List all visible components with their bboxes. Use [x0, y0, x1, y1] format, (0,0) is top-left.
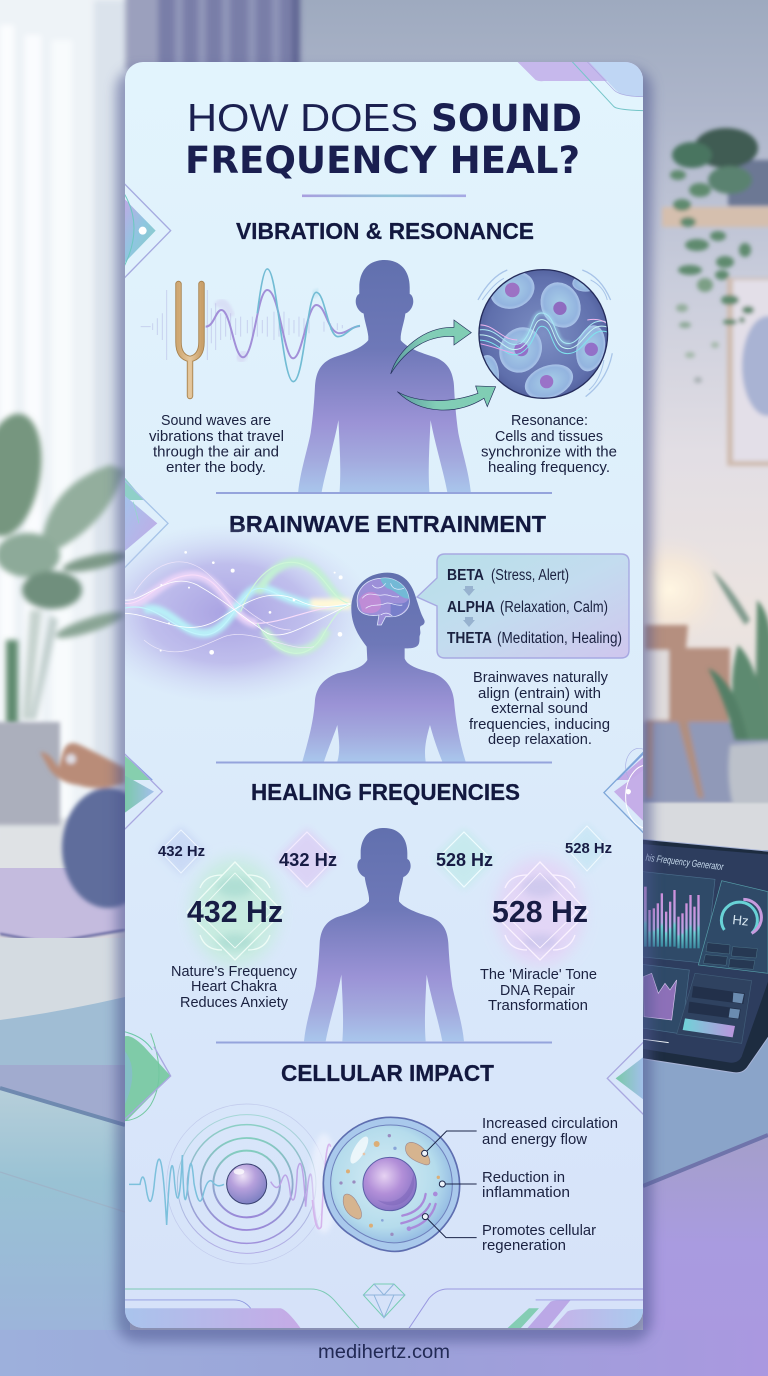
- figure: human silhouette: [298, 260, 471, 493]
- title: HOW DOES: [187, 97, 418, 140]
- label: 432 Hz large: 432 Hz: [187, 894, 283, 929]
- decor: left diamond 3: [124, 753, 162, 1050]
- text: regeneration benefit: regeneration: [482, 1238, 566, 1254]
- label: 432 Hz medium: 432 Hz: [279, 850, 337, 870]
- label: 528 Hz large: 528 Hz: [492, 894, 588, 929]
- text: brainwave caption: frequencies, inducing: [469, 717, 610, 733]
- background: lamp glow and side table: [610, 535, 768, 804]
- text: circulation benefit: [482, 1116, 618, 1148]
- section: brainwave entrainment: [81, 523, 629, 762]
- icon: resonating cells circle: [476, 265, 612, 405]
- tablet Hz readout: Hz: [732, 912, 749, 929]
- callout leaders: [422, 1131, 477, 1238]
- callout: brainwave states: ALPHA: [447, 599, 495, 616]
- background: right hanging plant and shelf: [662, 128, 768, 466]
- callout: brainwave states: (Meditation, Healing): [497, 630, 622, 647]
- text: inflammation benefit: [482, 1170, 570, 1201]
- text: 432 Hz benefits: Reduces Anxiety: [180, 995, 289, 1011]
- callout: brainwave states: THETA: [447, 630, 492, 647]
- heading: brainwave entrainment: BRAINWAVE ENTRAINMENT: [229, 511, 546, 537]
- icon: large diamond green: [187, 858, 283, 966]
- card shadow: [116, 68, 652, 1342]
- graphic: ripple rings around particle: [129, 1104, 337, 1264]
- icon: small diamond 432 blue: [156, 826, 206, 876]
- figure: head and shoulders profile: [302, 573, 466, 762]
- decor: right edge small diamond: [617, 748, 643, 780]
- text: resonance caption: Resonance:: [511, 413, 588, 429]
- label: 432 Hz small: 432 Hz: [158, 843, 205, 860]
- section: healing frequencies: [156, 823, 612, 1041]
- text: 528 Hz benefits: The 'Miracle' Tone: [480, 967, 597, 983]
- text: sound waves caption: [149, 413, 284, 476]
- background: left floor and pot: [0, 722, 130, 1022]
- text: regeneration benefit: Promotes cellular: [482, 1223, 596, 1239]
- section: vibration and resonance: [141, 260, 617, 493]
- label: 528 Hz small: 528 Hz: [565, 840, 612, 857]
- text: inflammation benefit: inflammation: [482, 1185, 570, 1201]
- decor: top right corner shapes: [516, 60, 644, 111]
- icon: footer diamond: [363, 1284, 405, 1318]
- icon: down arrow two: [463, 617, 475, 627]
- heading: vibration and resonance: VIBRATION & RESONANCE: [236, 218, 534, 244]
- background: left blue mat and floor: [0, 997, 130, 1376]
- background: right floor and mat: [0, 803, 768, 1376]
- background: left plant: [0, 409, 129, 725]
- text: resonance caption: healing frequency.: [488, 460, 610, 476]
- background: left window curtains: [0, 0, 300, 842]
- text: sound waves caption: through the air and: [153, 444, 279, 460]
- heading: cellular impact: CELLULAR IMPACT: [281, 1060, 494, 1086]
- title: [185, 97, 582, 182]
- text: sound waves caption: enter the body.: [166, 460, 266, 476]
- tablet title: his Frequency Generator: [645, 853, 725, 873]
- text: regeneration benefit: [482, 1223, 596, 1254]
- text: 432 Hz benefits: [171, 964, 298, 1011]
- text: sound waves caption: Sound waves are: [161, 413, 271, 429]
- label: 528 Hz medium: 528 Hz: [436, 850, 493, 870]
- icon: tuning fork: [178, 284, 202, 396]
- arrow: to cells upper: [391, 320, 471, 374]
- icon: glowing brain: [357, 578, 409, 625]
- background: frequency generator tablet: [633, 838, 768, 1073]
- icon: detailed cell: [323, 1117, 460, 1251]
- callout: brainwave states: BETA: [447, 567, 484, 584]
- background: meditating hand and leg: [40, 743, 154, 908]
- title: SOUND: [431, 97, 582, 140]
- text: brainwave caption: Brainwaves naturally: [473, 670, 609, 686]
- text: resonance caption: synchronize with the: [481, 444, 617, 460]
- text: 528 Hz benefits: DNA Repair: [500, 983, 575, 999]
- icon: small diamond 528 teal: [433, 828, 495, 890]
- chart: sound waves: [141, 269, 360, 382]
- heading: healing frequencies: HEALING FREQUENCIES: [251, 779, 520, 805]
- section: cellular impact: [129, 1104, 618, 1264]
- text: sound waves caption: vibrations that travel: [149, 429, 284, 445]
- text: 432 Hz benefits: Heart Chakra: [191, 979, 278, 995]
- icon: large diamond pink: [492, 858, 588, 966]
- figure: human silhouette: [304, 828, 464, 1041]
- arrow: to cells lower: [397, 386, 496, 410]
- text: circulation benefit: and energy flow: [482, 1132, 587, 1148]
- decor: right diamond 4: [607, 1042, 644, 1115]
- text: circulation benefit: Increased circulation: [482, 1116, 618, 1132]
- text: resonance caption: [481, 413, 617, 476]
- text: inflammation benefit: Reduction in: [482, 1170, 565, 1186]
- text: 432 Hz benefits: Nature's Frequency: [171, 964, 298, 980]
- footer: website: medihertz.com: [318, 1342, 450, 1363]
- background: right floor plant: [708, 570, 768, 815]
- icon: down arrow one: [463, 586, 475, 596]
- icon: small diamond 432 lilac: [276, 828, 338, 890]
- text: brainwave caption: deep relaxation.: [488, 732, 592, 748]
- callout: brainwave states: (Relaxation, Calm): [500, 599, 608, 616]
- text: 528 Hz benefits: [480, 967, 597, 1014]
- text: brainwave caption: [469, 670, 610, 748]
- text: 528 Hz benefits: Transformation: [488, 998, 588, 1014]
- text: brainwave caption: external sound: [491, 701, 588, 717]
- graphic: glowing brainwaves: [125, 526, 354, 691]
- callout: brainwave states: [417, 554, 629, 658]
- card panel: [125, 62, 643, 1328]
- decor: left diamond 4: [124, 1033, 171, 1122]
- decor: footer lines and bands: [124, 1289, 644, 1328]
- title: FREQUENCY HEAL?: [185, 139, 580, 182]
- text: resonance caption: Cells and tissues: [495, 429, 603, 445]
- card decorations: [124, 60, 669, 1328]
- decor: right diamond 3: [603, 752, 643, 834]
- decor: left diamond 2: [124, 480, 168, 780]
- text: brainwave caption: align (entrain) with: [478, 686, 601, 702]
- icon: small diamond 528 blue: [564, 823, 610, 873]
- callout: brainwave states: (Stress, Alert): [491, 567, 569, 584]
- decor: left diamond 1: [124, 183, 171, 500]
